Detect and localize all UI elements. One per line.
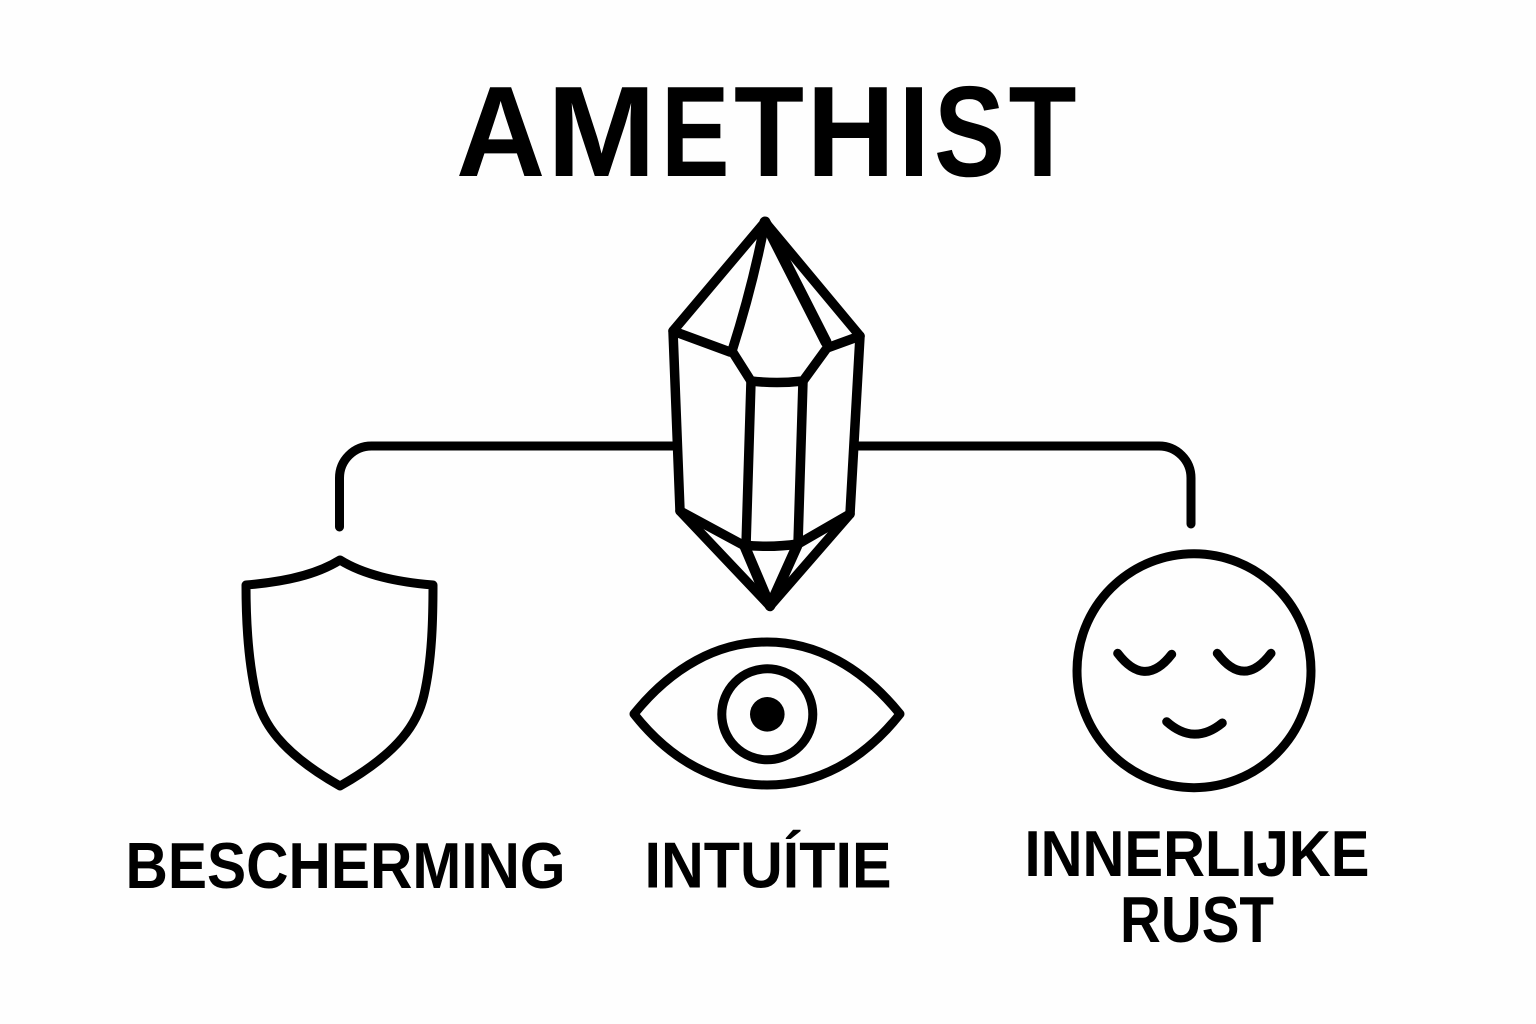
title: T xyxy=(1008,60,1076,204)
label: bescherming: BESCHERMING xyxy=(126,830,566,902)
title: T xyxy=(734,60,804,204)
icon: eye xyxy=(634,642,900,785)
label: intuitie: INTUÍTIE xyxy=(644,830,892,902)
icon: amethyst crystal xyxy=(673,222,860,606)
label: innerlijke rust: INNERLIJKE xyxy=(1024,818,1370,890)
label: innerlijke rust xyxy=(1024,818,1370,956)
title: M xyxy=(547,60,656,204)
title: S xyxy=(934,60,1005,204)
icon: shield xyxy=(246,560,433,786)
title: H xyxy=(806,60,895,204)
title: I xyxy=(899,60,929,204)
title: E xyxy=(661,60,730,204)
title: A xyxy=(456,60,545,204)
icon: peaceful face xyxy=(1077,554,1311,788)
label: innerlijke rust: RUST xyxy=(1120,884,1274,956)
connector: branches from crystal to shield and face xyxy=(340,446,1191,527)
